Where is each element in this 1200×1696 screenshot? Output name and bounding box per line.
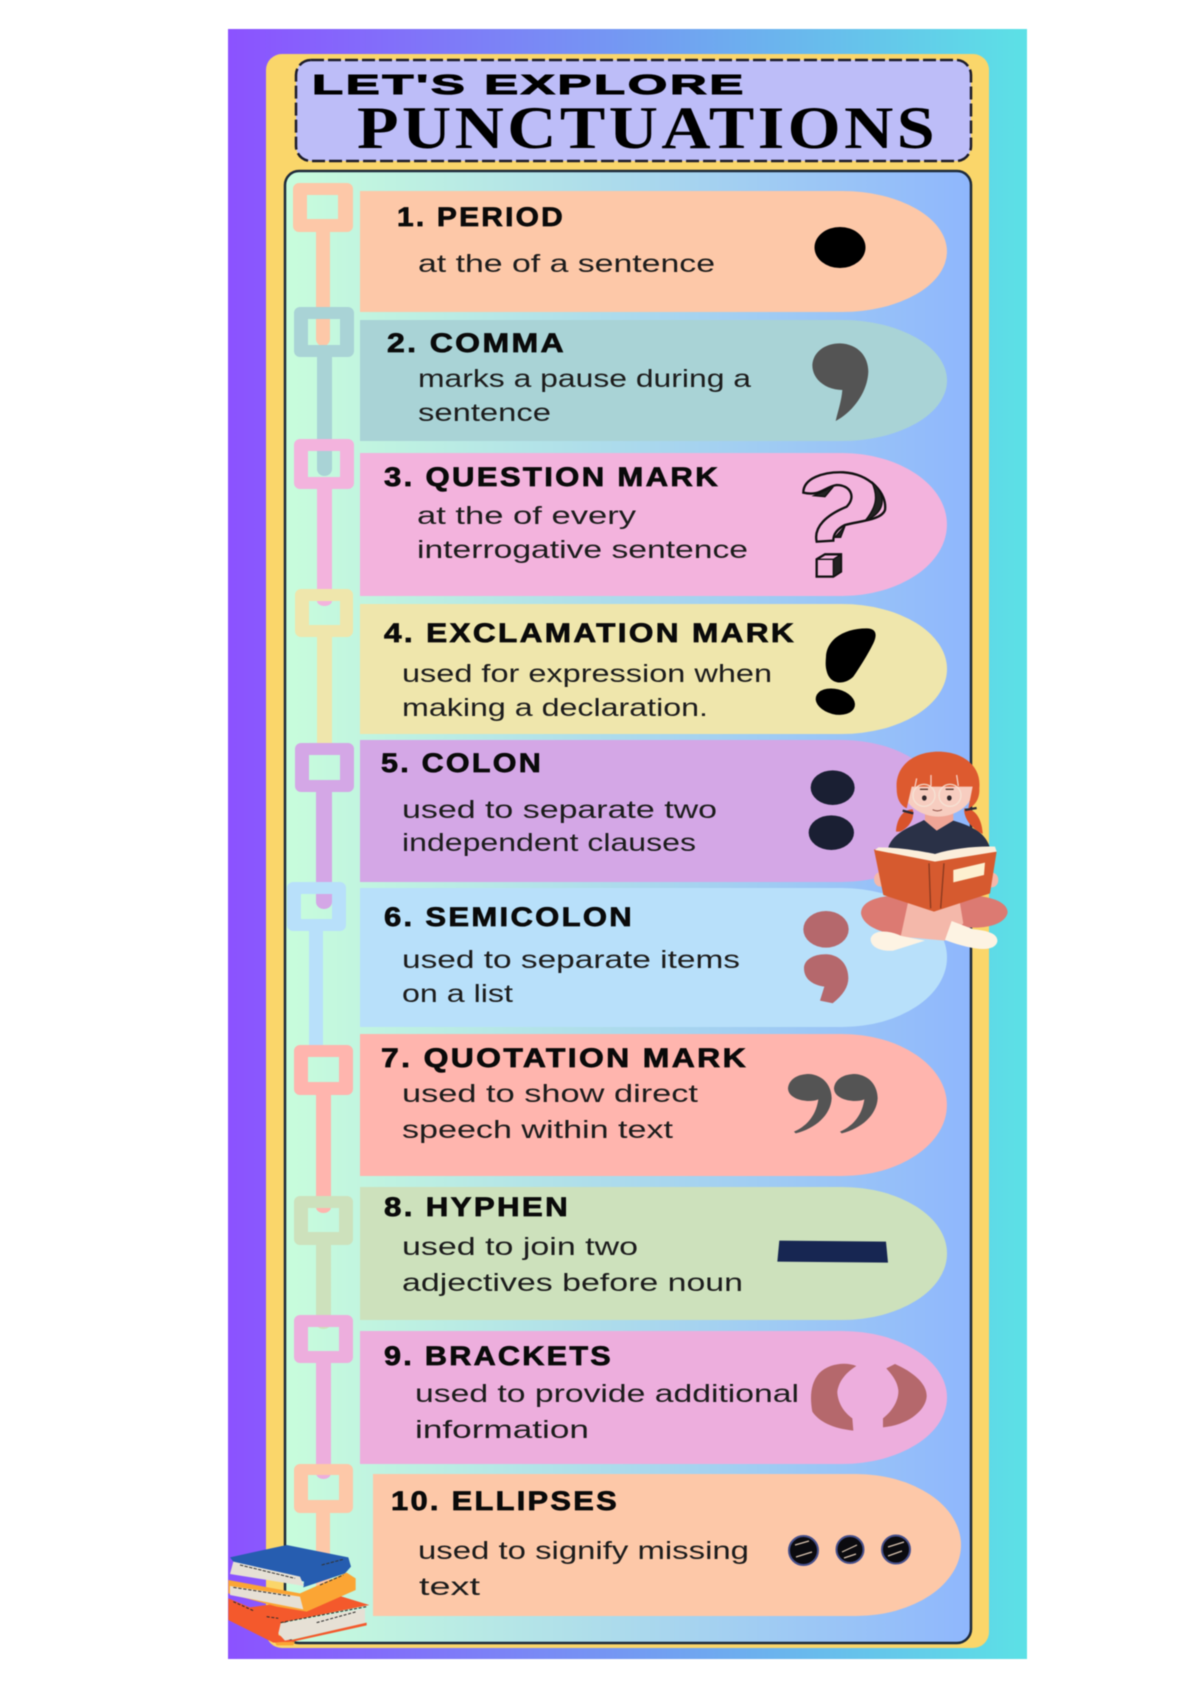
outer gradient background bbox=[228, 29, 1027, 1659]
description: information bbox=[415, 1416, 589, 1444]
row 10: ellipses bbox=[373, 1474, 961, 1616]
pill bbox=[360, 453, 947, 596]
neck bbox=[925, 813, 953, 832]
torso bbox=[888, 820, 991, 857]
face bbox=[904, 783, 973, 817]
book spine bbox=[929, 863, 944, 908]
pill bbox=[360, 1034, 947, 1176]
icon: comma bbox=[812, 343, 868, 421]
description: used to separate two bbox=[402, 796, 717, 824]
description: text bbox=[419, 1573, 480, 1601]
heading: 1. PERIOD bbox=[397, 202, 565, 232]
bottom book bbox=[228, 1595, 369, 1643]
heading: 2. COMMA bbox=[387, 328, 566, 358]
eyes bbox=[922, 795, 927, 801]
description: interrogative sentence bbox=[417, 536, 748, 564]
illustration: stack of books bbox=[228, 1545, 369, 1645]
socks bbox=[871, 921, 997, 951]
icon: question mark bbox=[803, 472, 885, 577]
heading: 9. BRACKETS bbox=[384, 1341, 613, 1371]
pill bbox=[360, 604, 947, 734]
title box bbox=[296, 60, 971, 161]
heading: 8. HYPHEN bbox=[384, 1192, 570, 1222]
description: on a list bbox=[402, 980, 513, 1008]
pill bbox=[360, 191, 947, 312]
fringe slits bbox=[915, 775, 958, 787]
description bbox=[417, 502, 748, 564]
description: used to provide additional bbox=[415, 1380, 799, 1408]
row 8: hyphen bbox=[360, 1187, 947, 1320]
ears bbox=[898, 788, 906, 796]
description: used to join two bbox=[402, 1233, 638, 1261]
icon: ellipses bbox=[789, 1536, 910, 1565]
row 1: period bbox=[360, 191, 947, 312]
icon: semicolon bbox=[803, 911, 849, 1003]
description bbox=[402, 796, 717, 857]
braids bbox=[896, 808, 983, 834]
heading: 3. QUESTION MARK bbox=[384, 462, 720, 492]
book cover bbox=[874, 849, 997, 912]
row 6: semicolon bbox=[360, 888, 947, 1027]
title banner bbox=[296, 60, 971, 161]
heading: 6. SEMICOLON bbox=[384, 902, 634, 932]
pill bbox=[360, 888, 947, 1027]
description: at the of a sentence bbox=[418, 250, 715, 278]
description: speech within text bbox=[402, 1116, 673, 1144]
row 9: brackets bbox=[360, 1331, 947, 1464]
icon: period bbox=[814, 227, 866, 268]
description: making a declaration. bbox=[402, 694, 708, 722]
description: sentence bbox=[418, 399, 551, 427]
icon: exclamation mark bbox=[813, 628, 876, 719]
knees bbox=[861, 895, 913, 936]
pill bbox=[360, 740, 947, 882]
heading: 7. QUOTATION MARK bbox=[381, 1043, 748, 1073]
yellow frame panel bbox=[266, 54, 989, 1648]
heading: 10. ELLIPSES bbox=[391, 1486, 619, 1516]
description: used to show direct bbox=[402, 1080, 698, 1108]
row 4: exclamation mark bbox=[360, 604, 947, 734]
timeline connector bbox=[287, 183, 354, 1613]
row 5: colon bbox=[360, 740, 947, 882]
hands bbox=[874, 872, 887, 887]
icon: brackets bbox=[811, 1364, 927, 1431]
description bbox=[402, 660, 772, 722]
description: adjectives before noun bbox=[402, 1269, 743, 1297]
row 2: comma bbox=[360, 320, 947, 441]
title line 2: PUNCTUATIONS bbox=[357, 95, 938, 161]
description bbox=[415, 1380, 799, 1444]
title line 1: LET'S EXPLORE bbox=[312, 69, 746, 100]
description bbox=[418, 365, 751, 427]
inner content panel bbox=[285, 171, 971, 1643]
row 3: question mark bbox=[360, 453, 947, 596]
top book bbox=[230, 1545, 351, 1587]
illustration: girl reading a book bbox=[861, 752, 1008, 951]
pill bbox=[360, 1187, 947, 1320]
icon: colon bbox=[809, 770, 855, 850]
icon: hyphen bbox=[777, 1241, 888, 1263]
legs bbox=[901, 893, 963, 941]
pill bbox=[360, 1331, 947, 1464]
description: used for expression when bbox=[402, 660, 772, 688]
pill bbox=[373, 1474, 961, 1616]
description: independent clauses bbox=[402, 829, 696, 857]
row 7: quotation mark bbox=[360, 1034, 947, 1176]
icon: quotation mark bbox=[788, 1074, 878, 1133]
glasses bbox=[913, 784, 961, 806]
middle book bbox=[228, 1573, 356, 1612]
description: marks a pause during a bbox=[418, 365, 751, 393]
description: used to signify missing bbox=[418, 1537, 749, 1565]
heading: 5. COLON bbox=[381, 748, 543, 778]
description bbox=[402, 1233, 743, 1297]
hair bbox=[897, 752, 979, 808]
description bbox=[418, 1537, 749, 1601]
description: used to separate items bbox=[402, 946, 740, 974]
pill bbox=[360, 320, 947, 441]
description: at the of every bbox=[417, 502, 637, 530]
book label bbox=[953, 863, 985, 882]
heading: 4. EXCLAMATION MARK bbox=[384, 618, 796, 648]
description bbox=[402, 1080, 698, 1144]
book pages bbox=[875, 847, 997, 862]
description bbox=[402, 946, 740, 1008]
